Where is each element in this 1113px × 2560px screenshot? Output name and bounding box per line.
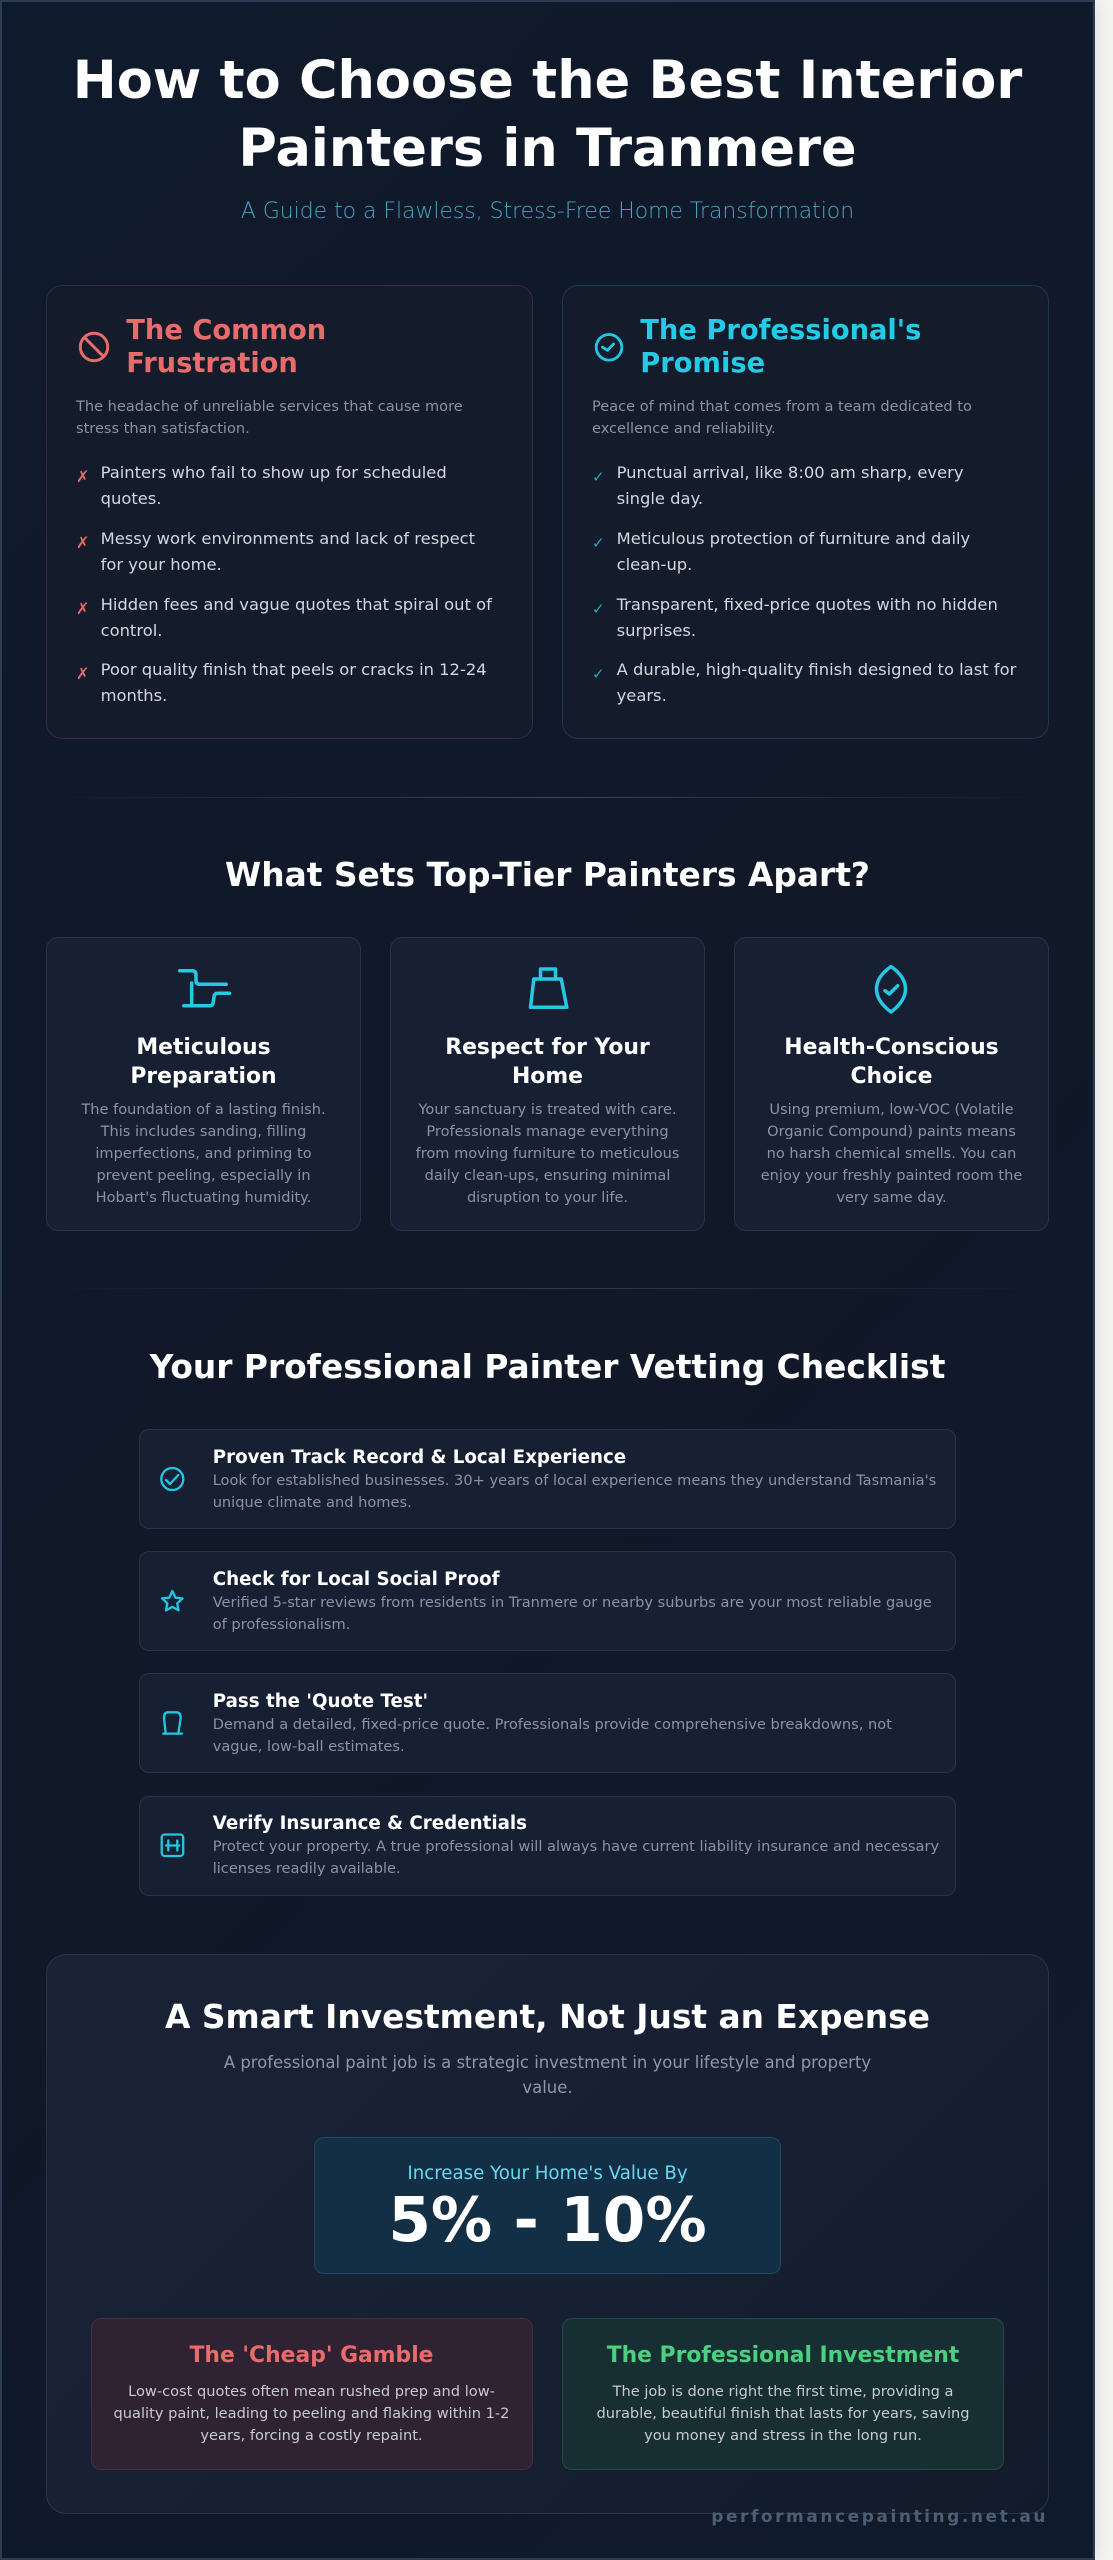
feature description: imperfections, and priming to <box>95 1145 312 1162</box>
subtitle: A Guide to a Flawless, Stress-Free Home Transformation <box>241 199 854 224</box>
icon: preparation <box>178 969 232 1008</box>
description: Peace of mind that comes from a team dedicated to <box>592 398 972 415</box>
item description <box>213 1838 939 1877</box>
item: durable finish: years. <box>617 686 667 705</box>
heading: the professional's promise: The Professional's <box>640 315 921 346</box>
item title: Check for Local Social Proof <box>213 1569 500 1590</box>
feature title: Respect for Your <box>445 1035 650 1060</box>
icon: leaf check <box>874 964 908 1014</box>
item: punctual arrival: Punctual arrival, like 8:00 am sharp, every <box>617 463 964 482</box>
comparison text: you money and stress in the long run. <box>644 2427 922 2444</box>
checklist item: insurance <box>139 1796 956 1896</box>
feature title: Preparation <box>130 1064 277 1089</box>
item: protection: Meticulous protection of furniture and daily <box>617 529 970 548</box>
panel description: value. <box>522 2078 573 2097</box>
description <box>76 398 463 437</box>
item: messy work: ✗ <box>76 533 89 552</box>
item description: vague, low-ball estimates. <box>213 1738 405 1755</box>
callout: home value increase <box>314 2137 781 2274</box>
item: poor finish: months. <box>101 686 167 705</box>
item: fixed price: ✓ <box>592 600 605 618</box>
description: The headache of unreliable services that cause more <box>76 398 463 415</box>
feature description: from moving furniture to meticulous <box>416 1145 679 1162</box>
item description: Verified 5-star reviews from residents in Tranmere or nearby suburbs are your most reliable gauge <box>213 1594 932 1611</box>
item: hidden fees: ✗ <box>76 599 89 618</box>
checklist item: social proof <box>139 1551 956 1651</box>
panel: the professional's promise <box>562 285 1049 739</box>
comparison text: years, forcing a costly repaint. <box>200 2427 423 2444</box>
item description: Look for established businesses. 30+ years of local experience means they understand Tasmania's <box>213 1472 936 1489</box>
item description <box>213 1472 936 1511</box>
item: no-shows: Painters who fail to show up for scheduled <box>101 463 447 482</box>
item: durable finish: ✓ <box>592 665 605 683</box>
feature description: disruption to your life. <box>467 1189 628 1206</box>
icon: star <box>160 1590 184 1612</box>
panel: respect for your home <box>390 937 705 1231</box>
promise list <box>592 463 1016 705</box>
item: durable finish <box>592 660 1016 705</box>
icon: bag <box>528 967 569 1009</box>
heading: the professional's promise <box>640 315 921 379</box>
heading: the common frustration: The Common <box>126 315 326 346</box>
panel description <box>224 2053 871 2097</box>
item description: unique climate and homes. <box>213 1494 412 1511</box>
feature title: Health-Conscious <box>784 1035 999 1060</box>
item: poor finish: ✗ <box>76 664 89 683</box>
item title: Verify Insurance & Credentials <box>213 1813 527 1834</box>
item description: licenses readily available. <box>213 1860 401 1877</box>
comparison text: quality paint, leading to peeling and flaking within 1-2 <box>114 2405 509 2422</box>
feature description <box>416 1101 679 1206</box>
feature title <box>784 1035 999 1089</box>
stat label: Increase Your Home's Value By <box>407 2163 688 2184</box>
item: fixed price: surprises. <box>617 621 696 640</box>
frustration list <box>76 463 492 705</box>
feature description: enjoy your freshly painted room the <box>761 1167 1022 1184</box>
feature description <box>81 1101 326 1206</box>
panel description: A professional paint job is a strategic investment in your lifestyle and property <box>224 2053 871 2072</box>
item title: Proven Track Record & Local Experience <box>213 1447 626 1468</box>
icon: prohibited sign <box>78 332 110 362</box>
feature title: Choice <box>850 1064 932 1089</box>
comparison title: The 'Cheap' Gamble <box>190 2343 434 2368</box>
description: stress than satisfaction. <box>76 420 250 437</box>
comparison: cheap gamble <box>90 2318 532 2470</box>
heading: vetting checklist: Your Professional Painter Vetting Checklist <box>150 1348 945 1386</box>
feature description <box>761 1101 1022 1206</box>
panel: the common frustration <box>46 285 533 739</box>
item: punctual arrival <box>592 463 964 508</box>
title <box>73 50 1022 179</box>
panel: a smart investment <box>46 1954 1049 2514</box>
feature title <box>130 1035 277 1089</box>
feature title: Meticulous <box>136 1035 271 1060</box>
feature description: The foundation of a lasting finish. <box>81 1101 326 1118</box>
heading: what sets top-tier painters apart: What Sets Top-Tier Painters Apart? <box>225 856 870 894</box>
item: hidden fees: control. <box>101 621 162 640</box>
item description: of professionalism. <box>213 1616 350 1633</box>
item: protection <box>592 529 970 574</box>
item: punctual arrival: single day. <box>617 489 703 508</box>
feature description: Hobart's fluctuating humidity. <box>96 1189 311 1206</box>
icon: quote document <box>162 1711 184 1735</box>
feature description: This includes sanding, filling <box>101 1123 306 1140</box>
comparison text: Low-cost quotes often mean rushed prep and low- <box>128 2383 495 2400</box>
panel: meticulous preparation <box>46 937 361 1231</box>
item: punctual arrival: ✓ <box>592 468 605 486</box>
item: protection: clean-up. <box>617 555 692 574</box>
item: poor finish <box>76 660 487 705</box>
feature description: no harsh chemical smells. You can <box>767 1145 1016 1162</box>
feature description: Your sanctuary is treated with care. <box>418 1101 677 1118</box>
comparison: professional investment <box>562 2318 1004 2470</box>
item: no-shows <box>76 463 447 508</box>
icon: credentials box <box>160 1833 184 1858</box>
description: excellence and reliability. <box>592 420 776 437</box>
comparison text: The job is done right the first time, providing a <box>613 2383 953 2400</box>
item: poor finish: Poor quality finish that peels or cracks in 12-24 <box>101 660 487 679</box>
feature description: Organic Compound) paints means <box>767 1123 1016 1140</box>
watermark: performancepainting.net.au <box>711 2507 1048 2527</box>
item: durable finish: A durable, high-quality finish designed to last for <box>617 660 1016 679</box>
icon: check circle <box>594 333 624 362</box>
item description: Protect your property. A true professional will always have current liability insurance and necessary <box>213 1838 939 1855</box>
checklist item: quote test <box>139 1673 956 1773</box>
item: no-shows: quotes. <box>101 489 162 508</box>
title: Painters in Tranmere <box>238 118 857 179</box>
feature title <box>445 1035 650 1089</box>
item: fixed price: Transparent, fixed-price quotes with no hidden <box>617 595 998 614</box>
description <box>592 398 972 437</box>
comparison text: durable, beautiful finish that lasts for years, saving <box>596 2405 970 2422</box>
comparison title: The Professional Investment <box>607 2343 959 2368</box>
heading: the common frustration: Frustration <box>126 348 298 379</box>
item: hidden fees <box>76 595 492 640</box>
item: messy work: for your home. <box>101 555 222 574</box>
feature description: prevent peeling, especially in <box>96 1167 311 1184</box>
item: hidden fees: Hidden fees and vague quotes that spiral out of <box>101 595 492 614</box>
heading: the professional's promise: Promise <box>640 348 765 379</box>
feature description: Using premium, low-VOC (Volatile <box>769 1101 1014 1118</box>
item description <box>213 1716 892 1755</box>
feature title: Home <box>512 1064 583 1089</box>
item: no-shows: ✗ <box>76 467 89 486</box>
checklist item: track record <box>139 1429 956 1529</box>
item: protection: ✓ <box>592 534 605 552</box>
panel: health-conscious choice <box>734 937 1049 1231</box>
item: messy work: Messy work environments and lack of respect <box>101 529 475 548</box>
item description <box>212 1594 932 1633</box>
comparison text <box>596 2383 970 2444</box>
feature description: very same day. <box>836 1189 947 1206</box>
item: fixed price <box>592 595 998 640</box>
comparison text <box>114 2383 509 2444</box>
heading: a smart investment: A Smart Investment, Not Just an Expense <box>165 1998 930 2036</box>
stat number: 5% - 10% <box>388 2185 707 2256</box>
item description: Demand a detailed, fixed-price quote. Professionals provide comprehensive breakdowns, not <box>213 1716 892 1733</box>
icon: check circle <box>160 1466 184 1492</box>
item title: Pass the 'Quote Test' <box>213 1691 428 1712</box>
feature description: Professionals manage everything <box>426 1123 669 1140</box>
title: How to Choose the Best Interior <box>73 50 1022 111</box>
item: messy work <box>76 529 475 574</box>
feature description: daily clean-ups, ensuring minimal <box>425 1167 670 1184</box>
heading: the common frustration <box>126 315 326 379</box>
